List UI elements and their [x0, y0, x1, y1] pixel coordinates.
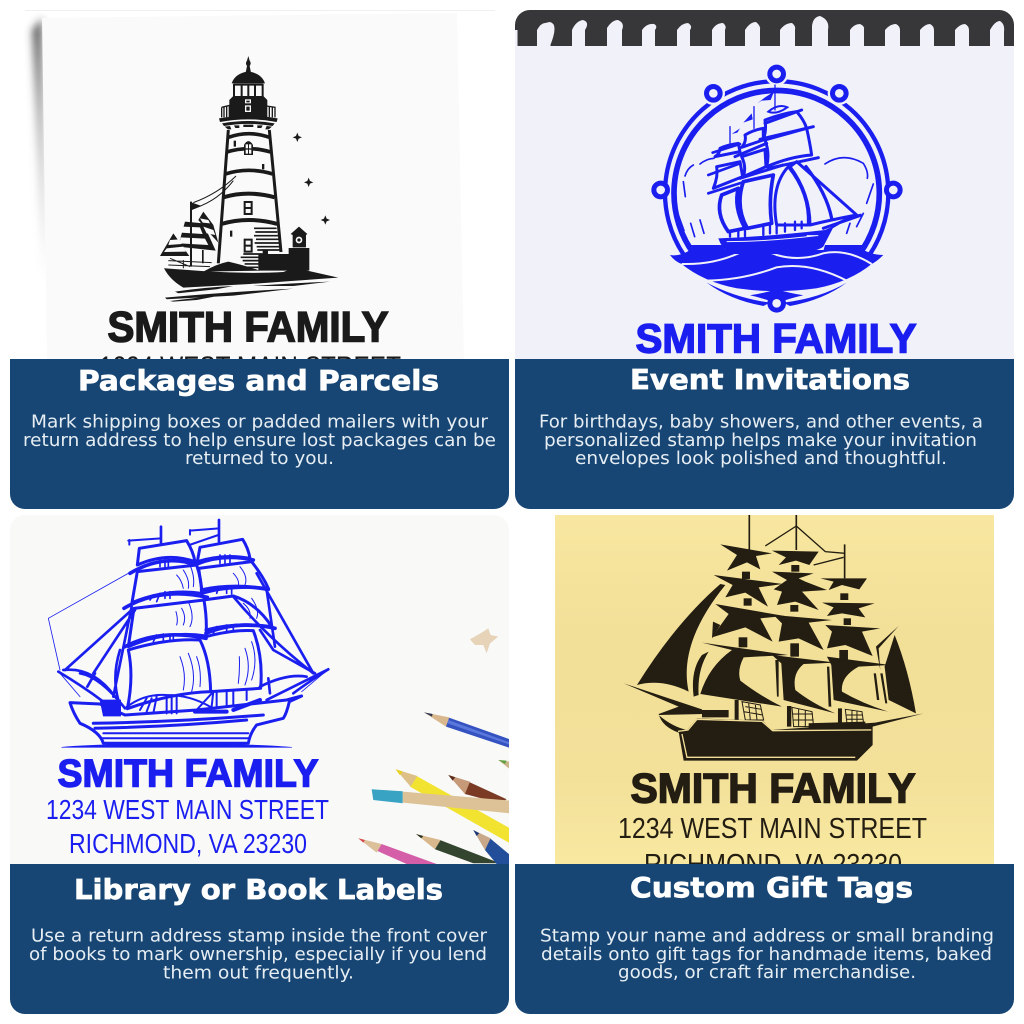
description: Stamp your name and address or small branding	[540, 926, 994, 946]
panel: custom gift tags	[515, 514, 1014, 1014]
description: personalized stamp helps make your invitation	[544, 431, 977, 451]
heading: Packages and Parcels	[78, 364, 439, 397]
description: Use a return address stamp inside the front cover	[31, 926, 488, 946]
heading: Custom Gift Tags	[630, 871, 913, 904]
stamp address line 1: 1234 WEST MAIN STREET	[618, 813, 927, 845]
description: returned to you.	[185, 449, 334, 469]
stamp name: SMITH FAMILY	[636, 316, 916, 362]
description	[29, 926, 488, 984]
stamp name: SMITH FAMILY	[58, 752, 318, 796]
description	[23, 412, 496, 469]
description	[540, 926, 994, 983]
description: details onto gift tags for handmade items, baked	[541, 945, 992, 965]
coloured pencils and shavings	[358, 628, 510, 864]
description: goods, or craft fair merchandise.	[618, 963, 916, 983]
stamp address: 1234 WEST MAIN STREET	[99, 351, 401, 384]
stamp address line 2: RICHMOND, VA 23230	[644, 849, 902, 881]
stamp name: SMITH FAMILY	[630, 764, 916, 812]
description: of books to mark ownership, especially if you lend	[29, 945, 487, 965]
panel: event invitations	[515, 10, 1014, 509]
icon: lighthouse and ship stamp	[160, 56, 338, 302]
description: Mark shipping boxes or padded mailers with your	[31, 412, 489, 432]
heading: Library or Book Labels	[74, 873, 443, 906]
stamp address line 1: 1234 WEST MAIN STREET	[46, 794, 329, 825]
description: them out frequently.	[163, 964, 354, 984]
torn dark strip	[515, 10, 1014, 46]
description: For birthdays, baby showers, and other events, a	[539, 412, 983, 432]
heading: Event Invitations	[630, 363, 910, 396]
panel: packages and parcels	[10, 10, 509, 509]
icon: black ship silhouette	[624, 514, 924, 761]
stamp name: SMITH FAMILY	[108, 304, 388, 352]
description	[539, 412, 983, 469]
icon: ship in porthole	[651, 62, 903, 313]
icon: blue outlined tall ship	[48, 520, 328, 747]
stamp address line 2: RICHMOND, VA 23230	[69, 828, 307, 859]
panel: library or book labels	[10, 515, 510, 1014]
description: envelopes look polished and thoughtful.	[575, 449, 947, 469]
description: return address to help ensure lost packages can be	[23, 431, 496, 451]
